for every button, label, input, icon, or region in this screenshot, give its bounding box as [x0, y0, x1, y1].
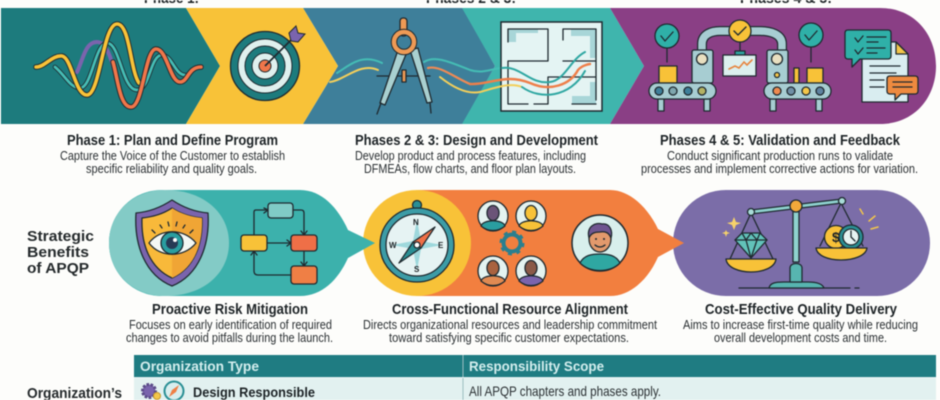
- panel: cost-effective delivery bubble: [673, 190, 930, 296]
- icon: shield with eye: [136, 200, 208, 286]
- text block: proactive risk mitigation: Focuses on early identification of required: [129, 317, 332, 332]
- text block: cross-functional resource alignment: [363, 301, 657, 345]
- panel: resource alignment bubble: [363, 190, 684, 296]
- table: organization responsibilities: Responsibility Scope: [469, 358, 604, 374]
- icon: balance scale: [722, 198, 878, 288]
- icon: team of four people and gear: [478, 201, 546, 286]
- text block: phases 4 and 5: [641, 132, 918, 176]
- text block: cross-functional resource alignment: toward satisfying specific customer expectations.: [389, 330, 629, 345]
- text block: phase 1: [60, 132, 285, 176]
- icon: production line with checks: [649, 20, 831, 111]
- text block: phase 1: Phase 1: Plan and Define Program: [67, 132, 278, 149]
- text block: phase 1: Capture the Voice of the Customer to establish: [60, 148, 285, 163]
- icon: voice of customer waves: [36, 24, 201, 107]
- text block: phases 2 and 3: Phases 2 & 3: Design and Development: [355, 132, 598, 149]
- icon: small compass: [164, 382, 184, 400]
- table: organization responsibilities: All APQP chapters and phases apply.: [469, 383, 661, 399]
- heading: strategic benefits of APQP: Strategic: [27, 228, 94, 245]
- text block: phases 4 and 5: Phases 4 & 5: Validation and Feedback: [660, 132, 901, 149]
- icon: navigation compass: N: [413, 218, 419, 227]
- icon: balance scale: $: [832, 229, 840, 245]
- text block: phases 4 and 5: Conduct significant production runs to validate: [667, 148, 893, 163]
- panel: proactive risk mitigation bubble: [109, 190, 375, 296]
- icon: navigation compass: E: [438, 241, 444, 250]
- text block: phases 2 and 3: Develop product and process features, including: [355, 148, 586, 163]
- table: organization responsibilities: Design Responsible: [193, 384, 315, 400]
- icon: target with arrow: [230, 26, 305, 100]
- icon: navigation compass: S: [414, 265, 420, 274]
- icon: navigation compass: W: [389, 241, 397, 250]
- heading: strategic benefits of APQP: [27, 228, 94, 277]
- text block: phases 2 and 3: [355, 132, 598, 176]
- text block: proactive risk mitigation: changes to avoid pitfalls during the launch.: [126, 330, 333, 345]
- text block: phases 2 and 3: DFMEAs, flow charts, and floor plan layouts.: [364, 161, 576, 176]
- text block: proactive risk mitigation: Proactive Risk Mitigation: [152, 301, 308, 318]
- text block: phase 1: specific reliability and quality goals.: [86, 161, 257, 176]
- icon: feedback document and speech bubbles: [845, 30, 918, 102]
- text block: cross-functional resource alignment: Directs organizational resources and leadership commitment: [363, 317, 657, 332]
- text block: cross-functional resource alignment: Cross-Functional Resource Alignment: [392, 301, 628, 318]
- icon: gears: [142, 384, 160, 400]
- heading: strategic benefits of APQP: Benefits: [27, 244, 89, 261]
- text block: cost-effective quality delivery: Cost-Effective Quality Delivery: [705, 301, 898, 318]
- icon: process flowchart: [241, 203, 317, 284]
- heading: strategic benefits of APQP: of APQP: [27, 260, 89, 277]
- text block: cost-effective quality delivery: [683, 301, 918, 345]
- icon: floor plan: [470, 22, 602, 111]
- icon: customer portrait: [572, 215, 628, 271]
- text block: cost-effective quality delivery: overall development costs and time.: [714, 330, 887, 345]
- table: organization responsibilities: Organization Type: [140, 358, 259, 374]
- table: organization responsibilities: [134, 355, 936, 400]
- icon: navigation compass: [380, 200, 454, 282]
- text block: proactive risk mitigation: [126, 301, 333, 345]
- panel: phase process band: [1, 8, 936, 124]
- icon: drafting compass and waves: [330, 18, 510, 114]
